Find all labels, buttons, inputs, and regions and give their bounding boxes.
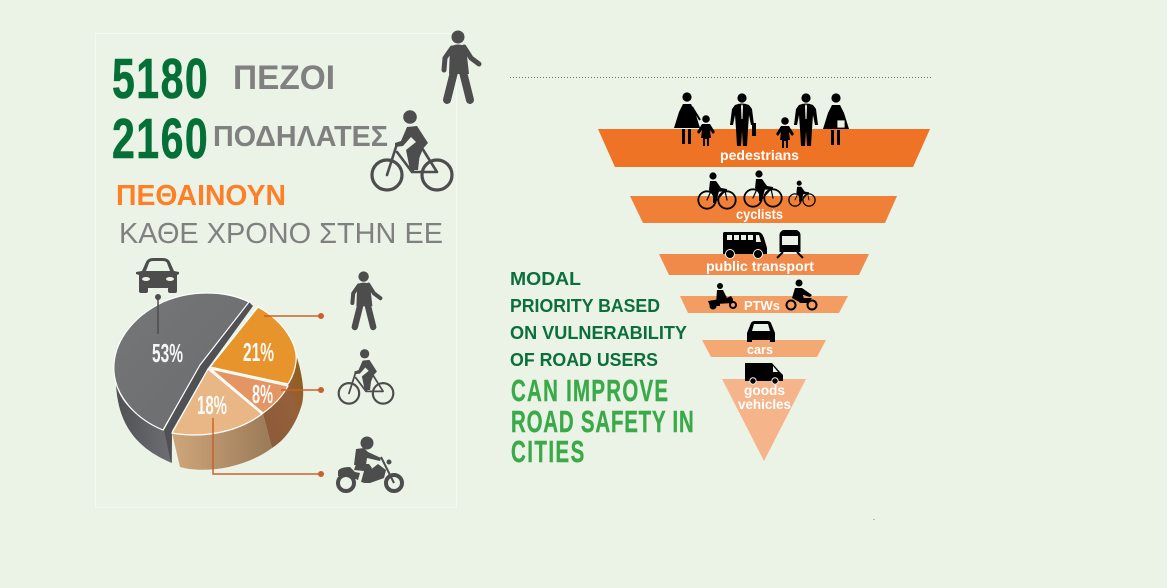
pyramid tier: powered two-wheelers: [680, 296, 848, 313]
text block: can improve road safety: CAN IMPROVE: [511, 373, 668, 408]
icon: cyclist: [372, 110, 452, 190]
text block: modal priority: PRIORITY BASED: [510, 296, 660, 316]
pie side: grey: [116, 385, 172, 463]
pie gap: dark edge: [164, 302, 253, 463]
pyramid tier: goods vehicles: vehicles: [738, 397, 791, 412]
stat: 2160 cyclists: [112, 106, 388, 171]
leader line: car: [155, 294, 161, 334]
pyramid tier: goods vehicles: [722, 379, 806, 461]
icon: car front: [136, 258, 179, 293]
heading: die: ΠΕΘΑΙΝΟΥΝ: [116, 180, 286, 212]
pyramid tier: public transport: [659, 254, 869, 275]
pie chart: road deaths by mode: [114, 293, 303, 470]
icon: motorbike: [786, 280, 816, 310]
label: 8%: 8%: [252, 379, 273, 409]
pyramid tier: pedestrians: pedestrians: [720, 147, 799, 163]
text block: modal priority: MODAL: [510, 269, 581, 289]
pie slice: 18% motorcyclists: [172, 369, 262, 435]
pyramid tier: cars: [702, 340, 826, 357]
divider: dotted line: [510, 76, 931, 78]
icon: walking pedestrian: [444, 30, 479, 100]
icon: scooter: [708, 283, 736, 310]
pyramid tier: cyclists: cyclists: [736, 206, 783, 222]
text block: modal priority: OF ROAD USERS: [510, 350, 658, 370]
pyramid tier: public transport: public transport: [706, 258, 814, 274]
icon: motorcyclist: [338, 436, 402, 491]
text block: can improve road safety: ROAD SAFETY IN: [511, 404, 694, 439]
label: 18%: 18%: [197, 390, 227, 420]
leader line: pedestrians: [264, 313, 324, 319]
pie slice: 53% cars: [114, 293, 249, 430]
panel: EU deaths statistics: [96, 34, 456, 508]
text block: modal priority: ON VULNERABILITY: [510, 323, 687, 343]
icon: car black: [747, 321, 775, 342]
icon: pedestrian small: [352, 271, 380, 327]
icon: bus: [723, 232, 767, 258]
stat: 2160 cyclists: ΠΟΔΗΛΑΤΕΣ: [213, 121, 388, 153]
stat: 5180 pedestrians: ΠΕΖΟΙ: [233, 59, 335, 97]
icons: pedestrian figures: [674, 92, 849, 148]
stat: 5180 pedestrians: 5180: [112, 46, 208, 111]
icon: van: [745, 363, 783, 384]
pyramid tier: goods vehicles: goods: [744, 383, 785, 398]
icon: cyclist small: [339, 349, 393, 404]
text block: modal priority: [510, 269, 687, 370]
pie side: brown: [263, 355, 303, 448]
label: 21%: 21%: [243, 337, 274, 367]
stat: 5180 pedestrians: [112, 46, 335, 111]
leader line: motorcyclists: [213, 418, 324, 477]
icons: cyclists: [698, 170, 815, 209]
text block: can improve road safety: [511, 373, 694, 469]
pie side: tan: [172, 414, 272, 470]
pyramid tier: cars: cars: [747, 342, 773, 357]
pyramid tier: pedestrians: [598, 129, 930, 167]
icon: train: [777, 230, 803, 258]
stat: 2160 cyclists: 2160: [112, 106, 208, 171]
pyramid tier: powered two-wheelers: PTWs: [744, 298, 780, 313]
heading: every year in the EU: ΚΑΘΕ ΧΡΟΝΟ ΣΤΗΝ ΕΕ: [119, 218, 443, 250]
pie slice: 21% pedestrians: [210, 307, 296, 384]
pie slice: 8% cyclists: [211, 369, 288, 413]
leader line: cyclists: [281, 387, 324, 393]
text block: can improve road safety: CITIES: [511, 434, 584, 469]
label: 53%: 53%: [152, 338, 183, 368]
mark: tiny speck: [873, 519, 875, 520]
pyramid tier: cyclists: [630, 196, 897, 223]
